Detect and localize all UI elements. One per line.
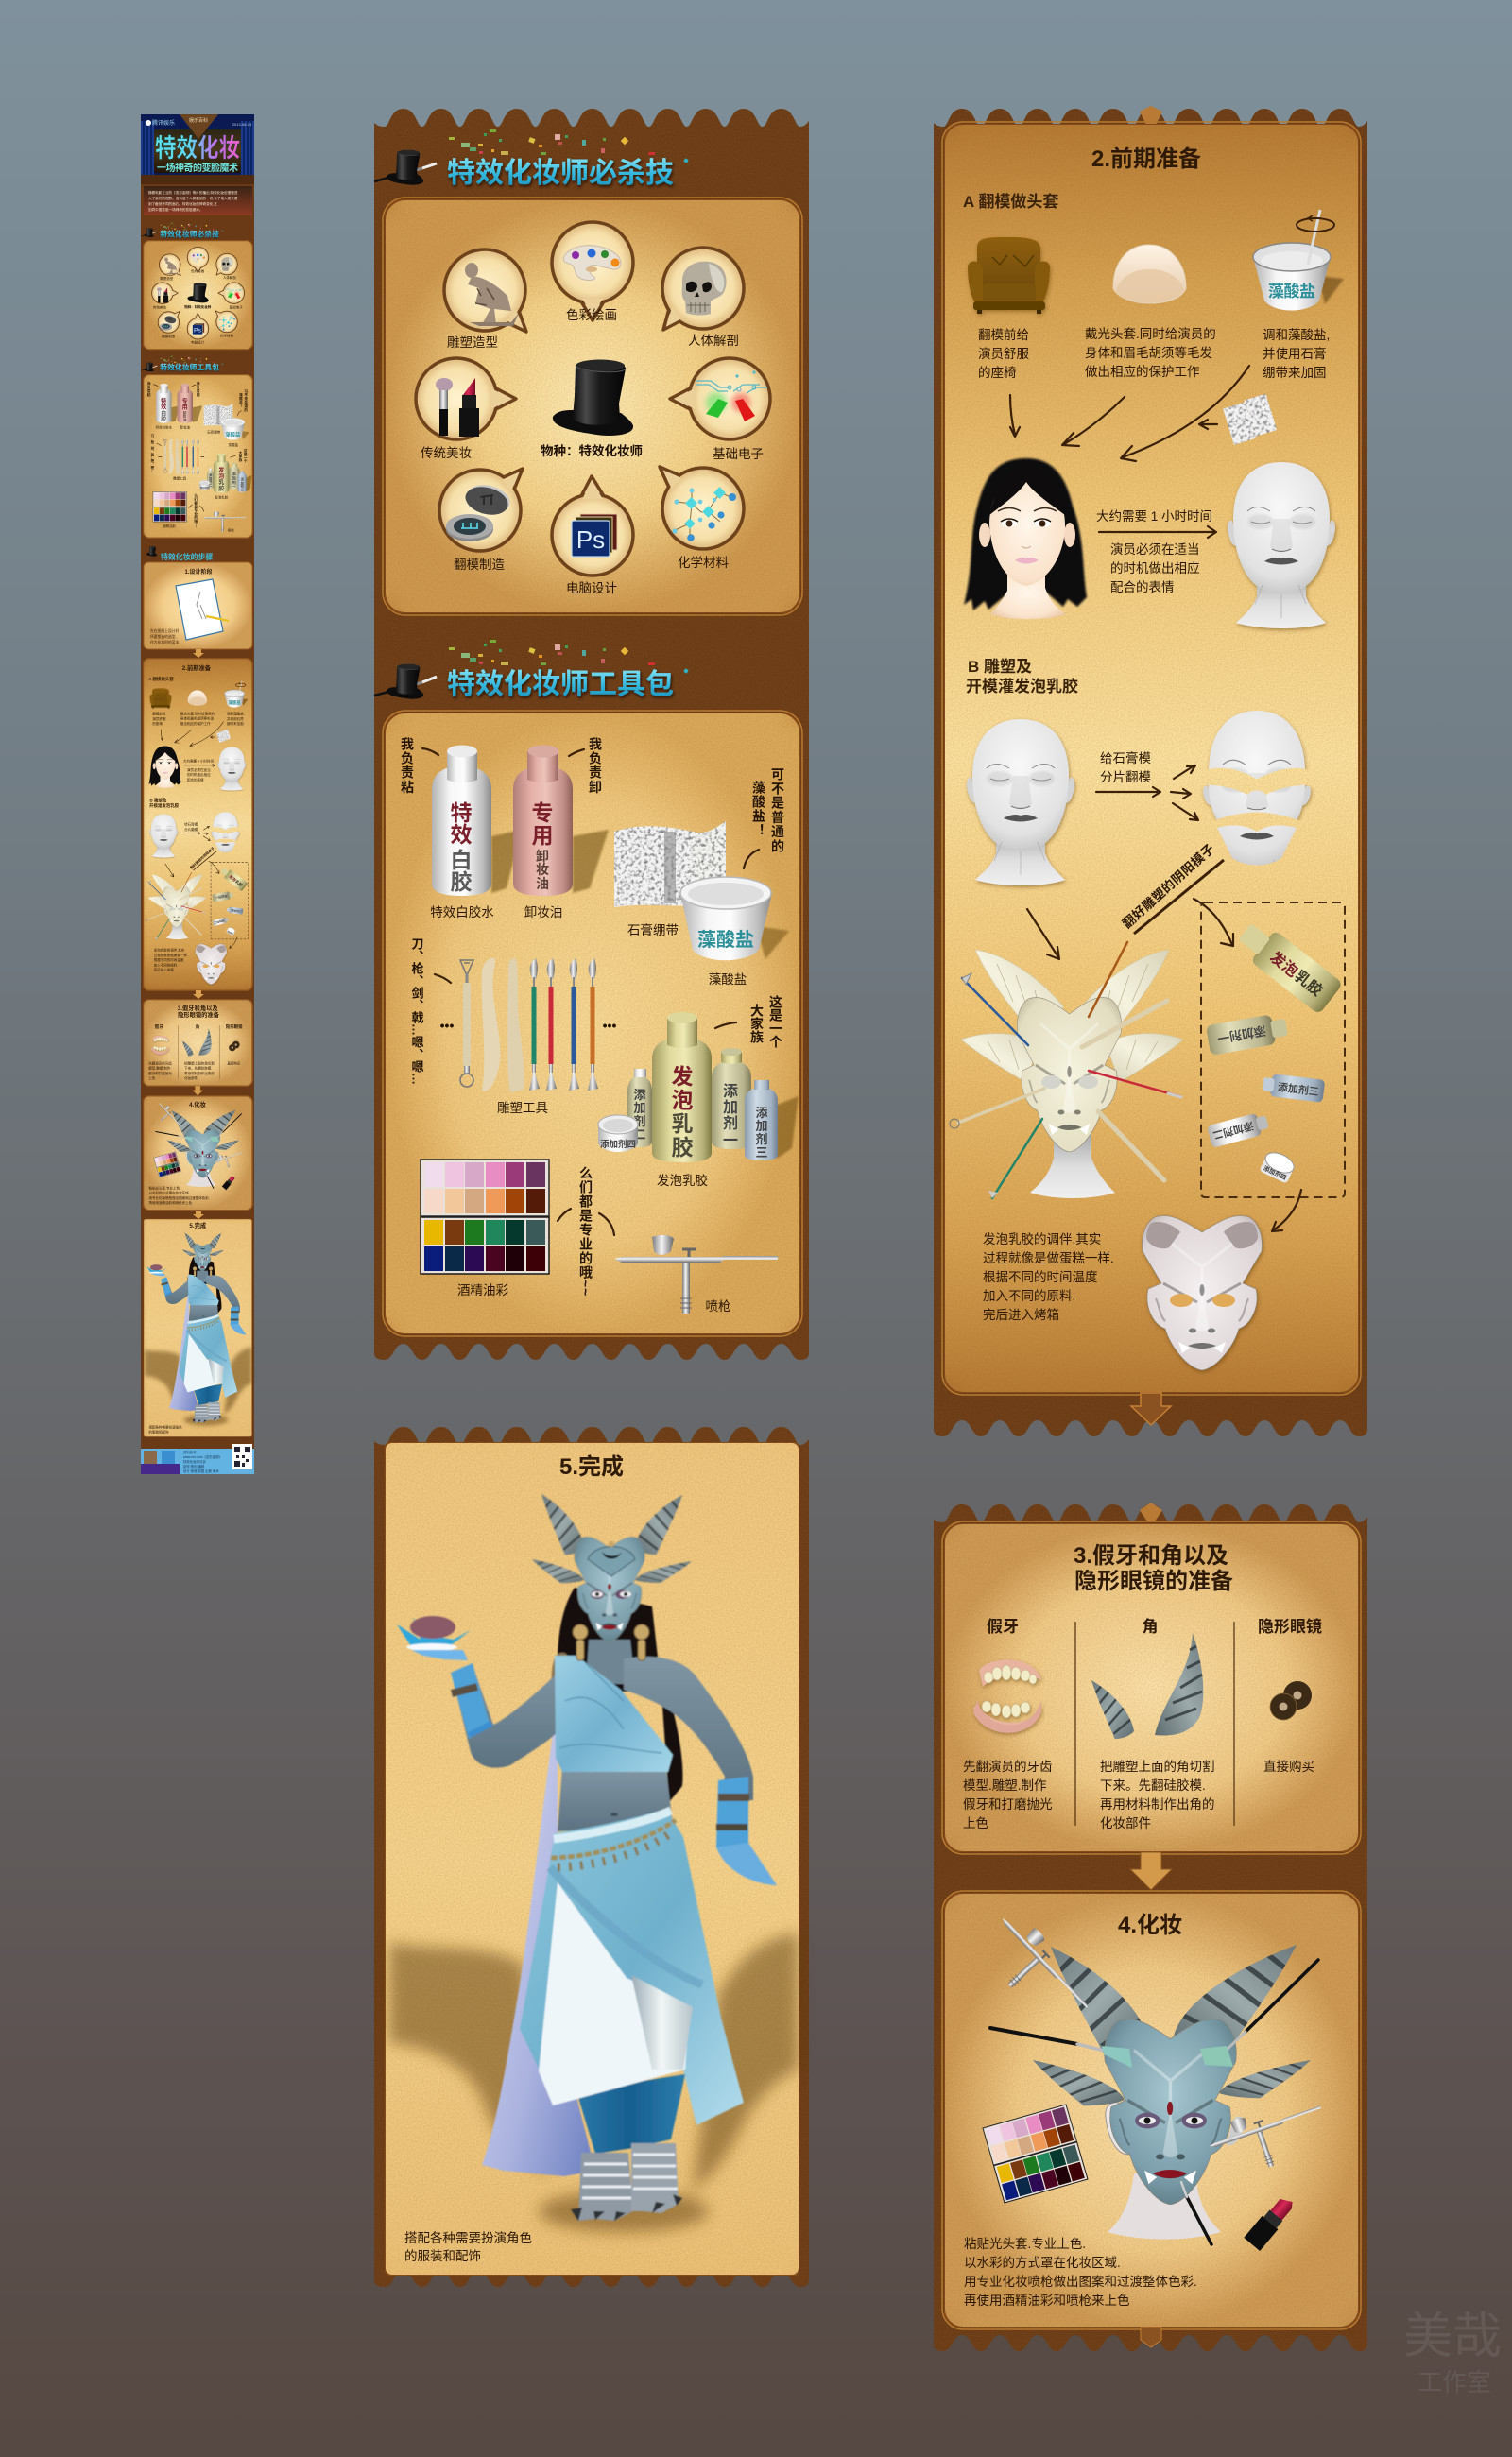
text: actor notes: 的时机做出相应: [1110, 560, 1200, 576]
mini: step 1 design: 所要塑造的造型,: [150, 634, 177, 639]
foam latex bottle family: [598, 1012, 799, 1188]
additive one: 添: [723, 1083, 738, 1100]
panel: steps 3 and 4 outer brown: [934, 1504, 1367, 2351]
arrow: top connector of step 3: [1140, 1503, 1162, 1521]
text: horns: 再用材料制作出角的: [1100, 1797, 1215, 1812]
text: split mould: 分片翻模: [1100, 770, 1151, 784]
additive three: 加: [755, 1119, 768, 1133]
tool: orange: [588, 958, 598, 1091]
horn: lower left: [1033, 2060, 1125, 2105]
mini: header stage: 特效化妆: [155, 134, 240, 163]
speech note: alginate: 可不是普通的: [770, 767, 785, 853]
text: costume: 的服装和配饰: [404, 2249, 481, 2263]
neck: [1030, 1134, 1115, 1198]
speech notes for bottles: 我负责卸: [588, 737, 603, 795]
panel: toolkit inner: [383, 711, 802, 1336]
mini: step 5 finished: [144, 1219, 252, 1436]
white glue bottle: 胶: [450, 869, 472, 894]
white glue bottle: 白: [450, 848, 472, 872]
tub: additive four: [1259, 1149, 1297, 1184]
right arm: [624, 1657, 753, 1800]
bubble: traditional makeup: [416, 358, 516, 439]
dashed box: foam latex materials: [1201, 902, 1345, 1197]
additive two: 剂: [633, 1114, 646, 1128]
title: 4.化妆: [1118, 1913, 1182, 1938]
label: 基础电子: [713, 446, 764, 461]
label: 化学材料: [678, 556, 729, 570]
mini: skills and tools panels: [141, 223, 252, 538]
bubble: computer design: [552, 476, 633, 576]
pink remover bottle: 用: [531, 823, 554, 848]
speech note: alginate: [744, 767, 785, 868]
icon: small plaster bandage: [1223, 394, 1278, 445]
alginate bowl: 藻酸盐: [697, 929, 754, 951]
text: chair: 翻模前给: [978, 327, 1029, 342]
sub heading B: 开模灌发泡乳胶: [966, 677, 1078, 696]
horns: [961, 950, 1183, 1082]
icon: alginate bowl with stick: [1253, 210, 1344, 310]
chest wrap: [555, 1656, 673, 1772]
skirt ribbon: [550, 1867, 702, 1984]
illustration: actress portrait: [964, 458, 1087, 619]
tube: foam latex: 乳胶: [1291, 967, 1326, 1000]
tube: additive one: [1206, 1012, 1289, 1056]
foam latex bottle family: 胶: [671, 1135, 694, 1160]
additive two: 添: [633, 1088, 646, 1102]
text: horns: 把雕塑上面的角切割: [1100, 1759, 1215, 1774]
pink remover bottle: 妆: [536, 862, 549, 877]
heading: toolkit: 特效化妆师工具包: [447, 669, 674, 700]
tube: additive two: [1207, 1110, 1270, 1148]
sculpting tools: [950, 942, 1181, 1198]
mini: intro box: 如同中国变脸一场神奇的变脸魔术。: [148, 207, 202, 212]
text: foam latex: 完后进入烤箱: [983, 1308, 1059, 1322]
additive one: [712, 1048, 751, 1149]
additive one: 加: [723, 1099, 738, 1116]
illustration: split mould pieces: [1203, 711, 1311, 903]
bubble: chemistry: [660, 467, 744, 549]
title text: 特效化妆师必杀技: [447, 158, 674, 189]
palette rotated: [983, 2105, 1088, 2203]
bottle labels: 特效白胶水: [430, 904, 494, 919]
tube: additive three: [1262, 1073, 1325, 1103]
speech notes for bottles: [400, 737, 603, 795]
label: 色彩绘画: [566, 307, 617, 322]
speech note: foam family: 这是一个: [768, 994, 783, 1048]
horn: lower right: [1219, 2060, 1311, 2098]
mini: intro box: [144, 186, 252, 215]
braid: [552, 1653, 569, 1729]
additive one: 一: [723, 1133, 738, 1149]
cape: [482, 1701, 595, 2176]
tube: foam latex: [1232, 916, 1343, 1015]
title: 2.前期准备: [1091, 146, 1201, 172]
horn: upper left: [541, 1494, 584, 1555]
bubble: colour painting: [552, 222, 633, 320]
airbrush: [614, 1235, 778, 1314]
mini: steps heading: [146, 546, 213, 561]
panel: miniature full-length infographic: [141, 114, 254, 1474]
text: split mould: 给石膏模: [1100, 750, 1151, 765]
speech note: foam family: 大家族: [749, 1003, 765, 1044]
additive three: 剂: [755, 1132, 768, 1146]
tool: blue: [569, 958, 579, 1091]
text: horns: 化妆部件: [1100, 1816, 1151, 1830]
bubble: computer design: Ps: [576, 525, 605, 554]
mini: footer: 制作:策划 编辑: [183, 1464, 205, 1469]
arrow: to mask: [1272, 1190, 1301, 1231]
text: costume: 搭配各种需要扮演角色: [404, 2230, 532, 2245]
tube: additive three: 添加剂三: [1277, 1080, 1320, 1098]
horn: upper right: [1174, 1945, 1297, 2051]
horn: lower right: [635, 1561, 692, 1583]
column headings: 角: [1142, 1617, 1159, 1636]
alginate bowl: [680, 877, 789, 987]
text: actor notes: 配合的表情: [1110, 580, 1174, 594]
panel contents: skills and tools: [374, 129, 802, 1336]
mini: footer: www.xxx.com《变形金刚》: [183, 1454, 222, 1459]
panel: step 3 inner: [942, 1521, 1361, 1854]
mini: steps 3 and 4: [143, 999, 252, 1211]
text: false teeth: 模型.雕塑.制作: [963, 1778, 1047, 1793]
arrow: to plaster head: [1099, 526, 1216, 538]
text: false teeth: 假牙和打磨抛光: [963, 1796, 1053, 1812]
text: alginate: 绷带来加固: [1263, 366, 1327, 380]
wand: [374, 173, 406, 181]
icon: molecules: [673, 491, 732, 537]
heading: special effects makeup artist skills: [374, 129, 689, 189]
panel: step 4 inner: [942, 1891, 1361, 2329]
watermark: 工作室: [1418, 2368, 1491, 2397]
bubble: electronics: [670, 358, 770, 439]
panel: step 2 preparation inner: [942, 122, 1361, 1395]
speech note: tools: •••: [440, 1018, 454, 1033]
icon: brush and lipstick: [436, 378, 453, 391]
horn: upper left: [1051, 1947, 1148, 2055]
speech notes for bottles: 我负责粘: [400, 737, 415, 795]
arrow: bottom connector: [1141, 2328, 1161, 2347]
foam latex bottle family: 发: [671, 1064, 694, 1089]
label: 酒精油彩: [457, 1283, 508, 1297]
left arm: [452, 1665, 559, 1768]
title: 5.完成: [559, 1454, 624, 1480]
text: false teeth: 上色: [963, 1815, 988, 1830]
eyes, forehead mark and lips: [1139, 2102, 1203, 2178]
head: [575, 1537, 644, 1642]
neck and bare head: [1108, 2174, 1221, 2240]
arrow: step 2 to step 3 connector: [1131, 1393, 1171, 1425]
figure: demon woman: [397, 1494, 777, 2221]
additive four: 添加剂四: [600, 1139, 636, 1150]
sub heading B: B 雕塑及: [968, 657, 1032, 676]
icon: skull: [682, 262, 727, 316]
mini: header stage: [141, 114, 254, 175]
text: alginate: 并使用石膏: [1263, 346, 1327, 361]
mini: intro box: 到了截然不同的面孔。特效化妆的神奇变化,正: [148, 201, 217, 206]
title: 隐形眼镜的准备: [1074, 1569, 1233, 1594]
airbrush: right: [1204, 2091, 1333, 2183]
icon: false teeth: [973, 1659, 1041, 1733]
confetti: [449, 129, 689, 163]
mini: steps heading: 特效化妆的步骤: [161, 552, 213, 561]
left wrist wraps: [451, 1663, 491, 1739]
mini: intro box: 随着电影工业的《变形金刚》等片的播出,特效化妆也慢慢进: [148, 190, 238, 195]
additive three: 三: [755, 1145, 768, 1160]
face details and crown: [588, 1541, 635, 1629]
white glue bottle: 特: [450, 800, 472, 825]
tube: additive two: 添加剂二: [1211, 1119, 1255, 1143]
mini: step 1 design: [144, 562, 252, 649]
mini: header stage: 2013-06-13: [232, 122, 252, 127]
text: foam latex: 根据不同的时间温度: [983, 1270, 1098, 1284]
pink remover bottle: [513, 745, 609, 896]
column headings: 假牙: [987, 1618, 1019, 1636]
mini: arrows between steps: [193, 649, 204, 1219]
pink remover bottle: 油: [536, 876, 549, 891]
face: [1105, 2019, 1236, 2205]
text: makeup: 以水彩的方式罩在化妆区域.: [964, 2256, 1121, 2270]
icon: palette: [563, 246, 621, 280]
white glue bottle: 效: [450, 822, 472, 847]
tool: teal: [529, 958, 540, 1091]
illustration: plaster head sculpture: [967, 719, 1074, 885]
text: bald cap: 做出相应的保护工作: [1085, 364, 1200, 379]
hair: [558, 1588, 683, 1802]
horn: upper right: [635, 1495, 682, 1555]
text: actor notes: 演员必须在适当: [1110, 542, 1200, 557]
mini: footer: 资料参考:: [183, 1450, 198, 1454]
main foam bottle: [652, 1037, 712, 1162]
illustration: demon makeup head: [1033, 1945, 1311, 2240]
plaster bandage: [614, 821, 726, 937]
label: 人体解剖: [688, 334, 739, 348]
speech note: foam family: [715, 994, 783, 1048]
arrow: step 3 to step 4: [1130, 1852, 1172, 1890]
sub heading A: A 翻模做头套: [963, 192, 1058, 211]
bubble: mould making: [439, 469, 523, 551]
speech note: tools: [410, 937, 616, 1085]
arrows: split: [1096, 765, 1198, 820]
icon: large top hat: [553, 359, 633, 436]
mini: header stage: 娱乐百科: [189, 117, 208, 124]
tube: foam latex: 发泡: [1266, 948, 1301, 981]
illustration: cream demon sculpture with tools: [950, 942, 1183, 1198]
column headings: 隐形眼镜: [1258, 1617, 1322, 1636]
additive four: [598, 1115, 638, 1152]
alginate bowl: 藻酸盐: [709, 972, 747, 987]
arrows: to sculpture and to materials: [1027, 899, 1233, 959]
text: foam latex: 发泡乳胶的调伴.其实: [983, 1231, 1101, 1246]
text: alginate: 调和藻酸盐,: [1263, 328, 1330, 342]
label: 喷枪: [705, 1298, 731, 1314]
speech note: tools: •••: [603, 1018, 616, 1033]
rotated label: two-part mould: 翻好雕塑的阴阳模子: [1119, 841, 1217, 931]
sculpture tools: [460, 958, 598, 1115]
mini: header stage: 一场神奇的变脸魔术: [157, 162, 238, 174]
icon: Photoshop: [580, 514, 617, 550]
brushes: [990, 1960, 1318, 2244]
additive one: 剂: [723, 1114, 738, 1132]
bottle labels: [430, 904, 562, 919]
mini: header stage: 腾讯娱乐: [152, 119, 175, 127]
mini: footer: 特效化妆师访谈: [183, 1459, 206, 1464]
airbrush: upper left: [972, 1906, 1100, 2036]
panel: step 5 outer brown: [374, 1427, 809, 2287]
watermark: [1403, 2310, 1502, 2397]
panel contents: steps 3 and 4: [942, 1521, 1361, 2329]
skirt: [520, 1809, 744, 2125]
text: false teeth: 先翻演员的牙齿: [963, 1760, 1053, 1774]
heading: toolkit: [374, 640, 689, 700]
earrings: [573, 1624, 649, 1660]
speech note: tools: 刀、枪、剑、戟…嗯、嗯…: [410, 937, 423, 1085]
text: foam latex: 加入不同的原料.: [983, 1289, 1075, 1303]
icon: circuit and LEDs: [696, 381, 767, 393]
additive two: 加: [633, 1101, 646, 1115]
alcohol palette: [421, 1160, 549, 1274]
text: makeup: 用专业化妆喷枪做出图案和过渡整体色彩.: [964, 2274, 1197, 2289]
icon: contact lenses: [1270, 1681, 1312, 1720]
additive three: 添: [755, 1106, 768, 1120]
apron fold: [631, 1975, 693, 2070]
white apron: [539, 1882, 690, 2105]
text: chair: 的座椅: [978, 366, 1017, 380]
additive three: [745, 1080, 778, 1160]
feet: [571, 2143, 682, 2221]
right wrist wraps and hand: [716, 1777, 777, 1885]
arrows: to actor: [1010, 366, 1249, 461]
panel: step 5 finished inner: [385, 1442, 799, 2276]
illustration: finished foam mask: [1143, 1215, 1262, 1370]
mini: intro box: 入了我们的视野。没有这个人类看到的一切,有了他人类又看: [148, 196, 238, 200]
tool: paddles: [482, 958, 500, 1091]
foam latex bottle family: 泡: [671, 1088, 694, 1112]
text: chair: 演员舒服: [978, 347, 1029, 361]
icon: horn pieces: [1091, 1633, 1203, 1739]
additive two: [627, 1069, 652, 1147]
column headings: [987, 1617, 1322, 1636]
tub: additive four: 添加剂四: [1263, 1163, 1288, 1181]
foam latex bottle family: 乳: [671, 1111, 694, 1136]
label: 电脑设计: [566, 581, 617, 595]
label: 雕塑造型: [447, 335, 498, 350]
icon: lipstick: [1244, 2192, 1297, 2251]
face: [1017, 997, 1122, 1152]
icon: two mould discs: [464, 481, 513, 517]
mini: footer: 设计:美哉 制图 企鹅 美术: [183, 1469, 219, 1473]
belt: [554, 1811, 671, 1839]
foam latex bottle family: 发泡乳胶: [657, 1173, 708, 1188]
plate with pastry: [397, 1616, 471, 1660]
icon: alginate bowl with stick: 藻酸盐: [1268, 283, 1315, 301]
watermark: 美哉: [1403, 2310, 1502, 2364]
panel: skills inner: [383, 198, 802, 615]
mini: step 1 design: 1.设计阶段: [184, 568, 213, 576]
icon: bald cap: [1113, 245, 1186, 303]
panel: step 2 outer brown: [934, 109, 1367, 1436]
mini: brown body: [141, 175, 254, 1449]
text: foam latex: 过程就像是做蛋糕一样.: [983, 1251, 1114, 1265]
text: makeup: 粘贴光头套.专业上色.: [964, 2236, 1086, 2251]
panel: skills and tools outer brown: [374, 109, 809, 1360]
tool: red: [546, 958, 557, 1091]
mini: step 1 design: 作为化妆时的蓝本: [150, 640, 180, 644]
pants: [576, 2074, 685, 2154]
bottle labels: 卸妆油: [524, 905, 562, 919]
column dividers: [1075, 1622, 1234, 1826]
icon: top hat: [387, 150, 423, 185]
illustration: plaster head: [1228, 462, 1335, 628]
speech note: professional: [558, 1166, 614, 1297]
text: makeup: 再使用酒精油彩和喷枪来上色: [964, 2293, 1130, 2308]
tube: additive one: 添加剂一: [1216, 1023, 1267, 1045]
label: 传统美妆: [421, 446, 472, 460]
text: bald cap: 身体和眉毛胡须等毛发: [1085, 345, 1212, 360]
bubble: sculpture: [444, 249, 526, 332]
text: horns: 下来。先翻硅胶模.: [1100, 1778, 1206, 1793]
text: duration: 大约需要 1 小时时间: [1096, 509, 1212, 524]
white glue bottle: [432, 745, 522, 896]
title: 3.假牙和角以及: [1074, 1543, 1228, 1569]
tool: loop: [460, 960, 473, 1087]
figure shadow: [389, 1933, 799, 2232]
mini: footer: [141, 1444, 254, 1474]
pink remover bottle: 专: [531, 800, 554, 825]
arrow: top connector of step 2: [1140, 106, 1162, 127]
label: 翻模制造: [454, 558, 505, 572]
horn: lower left: [532, 1559, 584, 1583]
midriff: [558, 1769, 673, 1831]
plaster bandage: 石膏绷带: [627, 922, 679, 937]
additive two: 二: [633, 1127, 646, 1142]
neck: [586, 1640, 635, 1684]
icon: thinker statue: [465, 263, 519, 326]
speech note: alginate: 藻酸盐！: [751, 780, 766, 838]
label: 雕塑工具: [497, 1101, 548, 1115]
mini: step 2 preparation: [143, 658, 252, 990]
mini: step 1 design: 先在图纸上设计好: [150, 628, 180, 633]
text: bald cap: 戴光头套.同时给演员的: [1085, 327, 1216, 341]
speech note: professional: 么们都是专业的哦~~: [578, 1166, 593, 1297]
text: contact lenses: 直接购买: [1263, 1759, 1314, 1774]
label: 物种：特效化妆师: [541, 443, 643, 458]
pink remover bottle: 卸: [536, 849, 549, 864]
icon: armchair: [968, 237, 1050, 314]
bubble: anatomy: [662, 248, 744, 330]
